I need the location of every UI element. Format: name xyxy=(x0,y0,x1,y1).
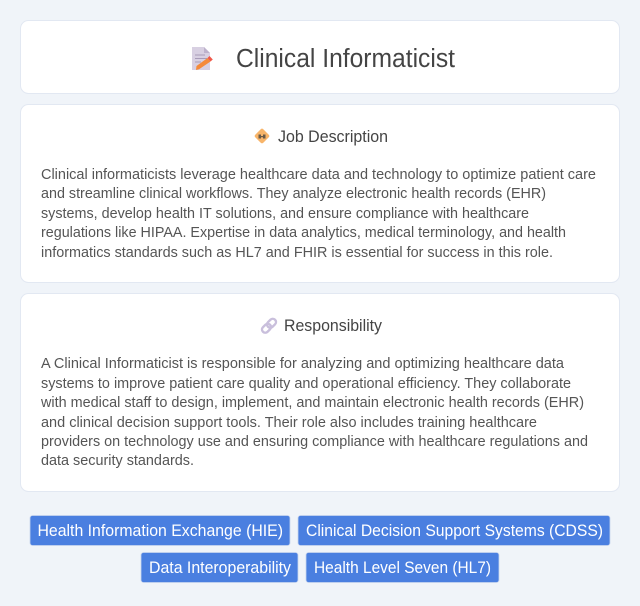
tag: HL7 xyxy=(306,552,499,582)
text block: responsibility body xyxy=(40,356,588,469)
panel: title card xyxy=(20,20,620,94)
tag: CDSS xyxy=(298,516,610,546)
text block: job description body: Clinical informaticists leverage healthcare data and technology to optimize patient care xyxy=(41,167,596,183)
tag: HIE xyxy=(30,516,290,546)
text block: job description body: and streamline clinical workflows. They analyze electronic health records (EHR) xyxy=(41,186,546,202)
text block: job description body: informatics standards such as HL7 and FHIR is essential for success in this role. xyxy=(41,245,553,261)
tag: data interoperability xyxy=(141,552,298,582)
text block: responsibility body: systems to improve patient care quality and operational efficiency. They collaborate xyxy=(41,376,571,392)
panel: job description xyxy=(20,104,620,282)
text block: job description body: systems, develop health IT solutions, and ensure compliance with healthcare xyxy=(41,206,529,222)
tag: HL7: Health Level Seven (HL7) xyxy=(314,558,491,577)
heading: responsibility: Responsibility xyxy=(284,316,383,335)
tag group xyxy=(30,516,610,582)
icon: document with pencil xyxy=(192,47,213,70)
text block: job description body xyxy=(41,167,596,261)
icon: chain link xyxy=(261,317,277,334)
text block: job description body: regulations like HIPAA. Expertise in data analytics, medical terminology, and health xyxy=(41,225,566,241)
text block: responsibility body: providers on technology use and ensuring compliance with healthcare regulations and xyxy=(41,434,588,450)
text block: responsibility body: data security standards. xyxy=(41,453,194,469)
panel: responsibility xyxy=(20,294,620,492)
tag: CDSS: Clinical Decision Support Systems (CDSS) xyxy=(306,521,603,540)
text block: responsibility body: and clinical decision support tools. Their role also includes training healthcare xyxy=(41,415,537,431)
tag: data interoperability: Data Interoperability xyxy=(149,558,292,577)
title: Clinical Informaticist xyxy=(236,45,455,73)
icon: orange diamond xyxy=(254,128,270,144)
text block: responsibility body: A Clinical Informaticist is responsible for analyzing and optimizing healthcare data xyxy=(41,356,565,372)
text block: responsibility body: with medical staff to design, implement, and maintain electronic health records (EHR) xyxy=(40,395,584,411)
heading: job description: Job Description xyxy=(278,127,388,146)
tag: HIE: Health Information Exchange (HIE) xyxy=(38,521,283,540)
